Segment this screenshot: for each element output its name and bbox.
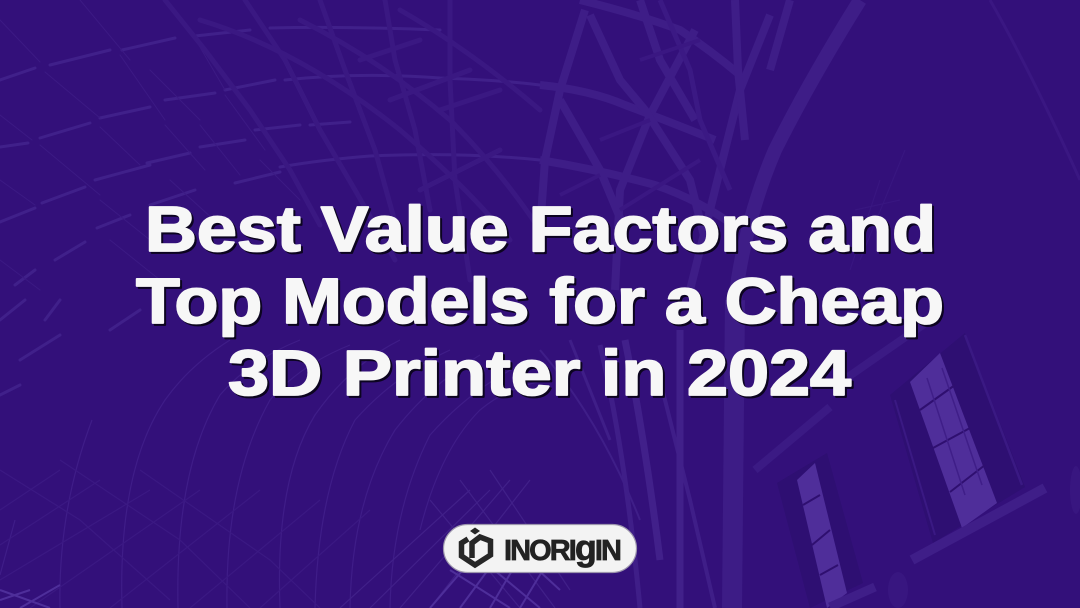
background: left window, lower: [755, 320, 930, 608]
background: column and lower struts: [540, 300, 735, 608]
title: Top Models for a Cheap: [136, 265, 944, 337]
background: bright lattice corners: [0, 535, 560, 608]
logo wordmark: INORIgIN: [504, 527, 622, 568]
title: Best Value Factors and: [145, 193, 936, 265]
background: tunnel arches lower left: [0, 340, 550, 608]
background: steel struts upper centre: [540, 0, 1080, 300]
background: right window, upper: [890, 333, 1045, 560]
background: lattice mesh lower left: [0, 460, 570, 608]
title: [136, 193, 944, 409]
background: glare lower right: [888, 466, 1080, 608]
background: dome ribs upper left: [0, 0, 540, 395]
title: 3D Printer in 2024: [228, 337, 851, 409]
logo badge: [444, 524, 636, 572]
logo pill: [444, 524, 636, 572]
logo icon: [462, 528, 490, 565]
